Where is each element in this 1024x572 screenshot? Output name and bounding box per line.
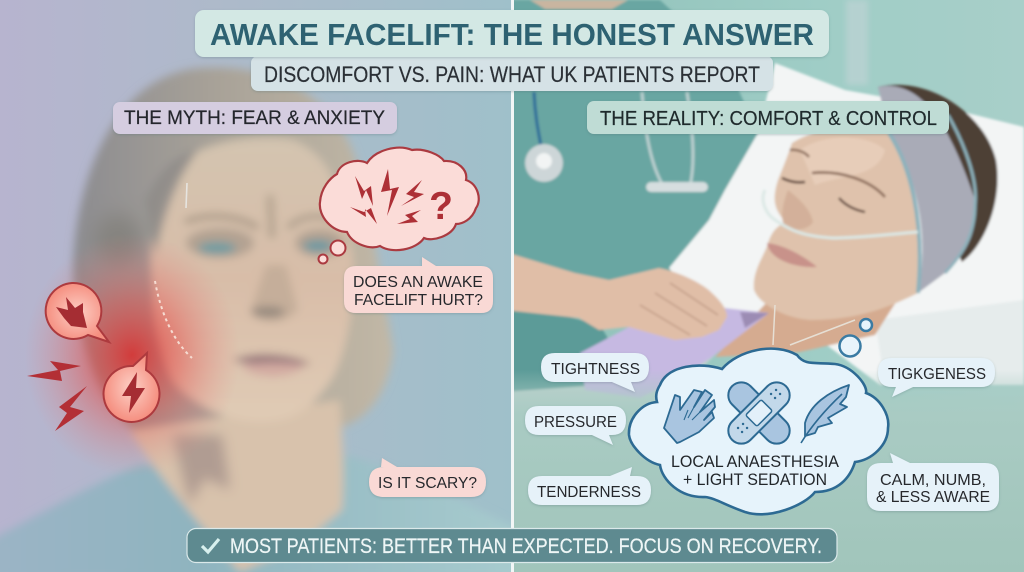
glove finger lines	[684, 407, 700, 420]
cloud text line one: LOCAL ANAESTHESIA	[671, 452, 840, 471]
thought bubble large	[840, 336, 860, 356]
panel: the reality, calm patient with nurse	[505, 0, 1024, 572]
lower lip	[240, 363, 305, 376]
feather quill	[801, 394, 842, 443]
subtitle text: DISCOMFORT VS. PAIN: WHAT UK PATIENTS REPORT	[264, 62, 760, 87]
icon: gloved hand	[664, 390, 715, 443]
upper lip	[232, 354, 312, 365]
headband outer edge	[945, 115, 975, 273]
callout shape	[344, 257, 493, 313]
myth text: THE MYTH: FEAR & ANXIETY	[124, 108, 385, 129]
headband inner edge	[889, 133, 920, 293]
question mark: ?	[429, 185, 453, 228]
title	[195, 10, 829, 57]
panel: the myth, blurred photo of worried woman	[0, 0, 520, 572]
badge circle with tail	[104, 353, 160, 422]
callout text: TIGHTNESS	[551, 361, 640, 378]
nose shadow	[250, 265, 298, 322]
thought cloud: confusion and pain	[320, 148, 479, 250]
bolt right top	[401, 180, 424, 206]
lightning bolt lower	[55, 386, 87, 431]
callout shape	[878, 358, 995, 397]
scrubs below arm	[505, 300, 640, 392]
woman figure, blurred	[0, 67, 520, 572]
pill	[587, 101, 949, 134]
forehead hair shading	[147, 150, 196, 250]
bottom banner	[187, 528, 837, 562]
callout: does an awake facelift hurt	[344, 257, 493, 313]
reality text: THE REALITY: COMFORT & CONTROL	[600, 108, 937, 130]
dark hair behind ear	[94, 214, 142, 266]
callout text: CALM, NUMB,	[880, 472, 986, 489]
thought bubble small	[318, 254, 328, 264]
back wall pipe	[846, 0, 868, 85]
callout text: IS IT SCARY?	[378, 475, 477, 492]
badge circle with tail	[46, 283, 109, 342]
callout text: DOES AN AWAKE	[353, 274, 483, 291]
finger lines	[640, 283, 718, 335]
stethoscope blue tube	[534, 92, 541, 146]
right eye socket	[295, 229, 345, 257]
pillow	[669, 63, 1024, 385]
neck and chest	[130, 400, 343, 572]
stethoscope head	[525, 144, 563, 182]
thought bubble small	[860, 319, 872, 331]
pill	[195, 10, 829, 57]
stethoscope grey tube	[642, 92, 693, 187]
lower soft green ground	[512, 370, 1024, 572]
banner pill	[187, 528, 837, 562]
pillow lower left	[505, 350, 720, 430]
right brow	[288, 216, 340, 228]
callout text line two: FACELIFT HURT?	[354, 292, 483, 309]
nostril shadow	[251, 306, 285, 318]
bandage back	[723, 377, 795, 449]
icon: crossed bandages	[723, 377, 795, 449]
bandage dots	[738, 390, 780, 432]
brow left	[790, 150, 809, 157]
bandage pad	[746, 400, 772, 426]
nasal tube to neck detail	[773, 305, 855, 345]
cloud text line two: + LIGHT SEDATION	[683, 470, 827, 489]
banner text: MOST PATIENTS: BETTER THAN EXPECTED. FOCUS ON RECOVERY.	[230, 535, 822, 558]
thought bubble large	[330, 240, 346, 256]
nurse scrubs	[505, 0, 758, 290]
gown dark fold	[740, 312, 769, 328]
nurse forearm and hand	[505, 252, 727, 340]
nasal cannula	[763, 190, 918, 238]
callout text: TENDERNESS	[537, 484, 641, 501]
subtitle	[251, 56, 773, 91]
nose	[782, 190, 813, 229]
hair strands on neck	[172, 435, 230, 505]
reality heading	[587, 101, 949, 134]
eye left	[782, 178, 805, 182]
white hair strand	[186, 183, 187, 208]
patient chest	[715, 288, 905, 357]
icon: check mark	[202, 539, 219, 552]
large bolt	[381, 169, 399, 216]
callout: tigkgeness	[878, 358, 995, 397]
clothing shoulders	[0, 455, 520, 572]
nurse top skin	[530, 0, 628, 9]
headband	[878, 86, 975, 293]
red pain glow	[35, 244, 228, 464]
bandage front	[723, 377, 795, 449]
callout shape	[525, 406, 626, 445]
cloud outline	[629, 349, 888, 514]
icon: feather	[801, 385, 849, 443]
callout shape	[541, 353, 649, 392]
left eye socket	[186, 228, 254, 258]
callout text: TIGKGENESS	[888, 366, 986, 383]
forehead highlight	[800, 138, 885, 185]
hair	[73, 67, 393, 440]
burst glyph	[56, 297, 87, 328]
callout: is it scary	[369, 458, 486, 497]
bolt left top	[355, 176, 373, 206]
pain badge: lightning	[104, 353, 160, 422]
patient hair	[878, 85, 998, 262]
lightning bolt upper	[27, 361, 81, 381]
patient face	[754, 127, 920, 320]
callout text: PRESSURE	[534, 414, 617, 431]
right background	[512, 0, 1024, 572]
incision dashed line	[155, 281, 192, 358]
callout text line two: & LESS AWARE	[876, 489, 990, 506]
glove shape	[664, 390, 715, 443]
callout shape	[528, 467, 651, 505]
stethoscope ear tips	[646, 182, 708, 192]
bolt right bottom	[397, 210, 421, 224]
callout shape	[369, 458, 486, 497]
pill	[113, 102, 397, 134]
callout: pressure	[525, 406, 626, 445]
pill	[251, 56, 773, 91]
right eye	[303, 240, 333, 252]
callout shape	[867, 453, 999, 511]
left brow	[185, 216, 258, 228]
eye right	[839, 198, 865, 212]
lips	[767, 243, 817, 267]
feather vane	[805, 385, 849, 436]
stethoscope head centre	[536, 153, 552, 169]
lightning glyph	[122, 372, 145, 413]
face	[151, 138, 354, 421]
callout: tenderness	[528, 467, 651, 505]
callout: calm, numb and less aware	[867, 453, 999, 511]
brow right	[812, 172, 885, 197]
frown lines	[270, 195, 272, 238]
cloud outline	[320, 148, 479, 250]
pain badge: burst	[46, 283, 109, 342]
bolt left bottom	[350, 207, 377, 224]
nurse and patient photo	[505, 0, 1024, 430]
callout: tightness	[541, 353, 649, 392]
lavender gown	[580, 308, 769, 398]
left eye	[198, 242, 236, 254]
centre divider	[511, 0, 514, 572]
myth heading	[113, 102, 397, 134]
pillow shading right	[875, 300, 1024, 385]
left background	[0, 0, 512, 572]
title text: AWAKE FACELIFT: THE HONEST ANSWER	[210, 17, 814, 52]
thought cloud: local anaesthesia and sedation	[629, 349, 888, 514]
